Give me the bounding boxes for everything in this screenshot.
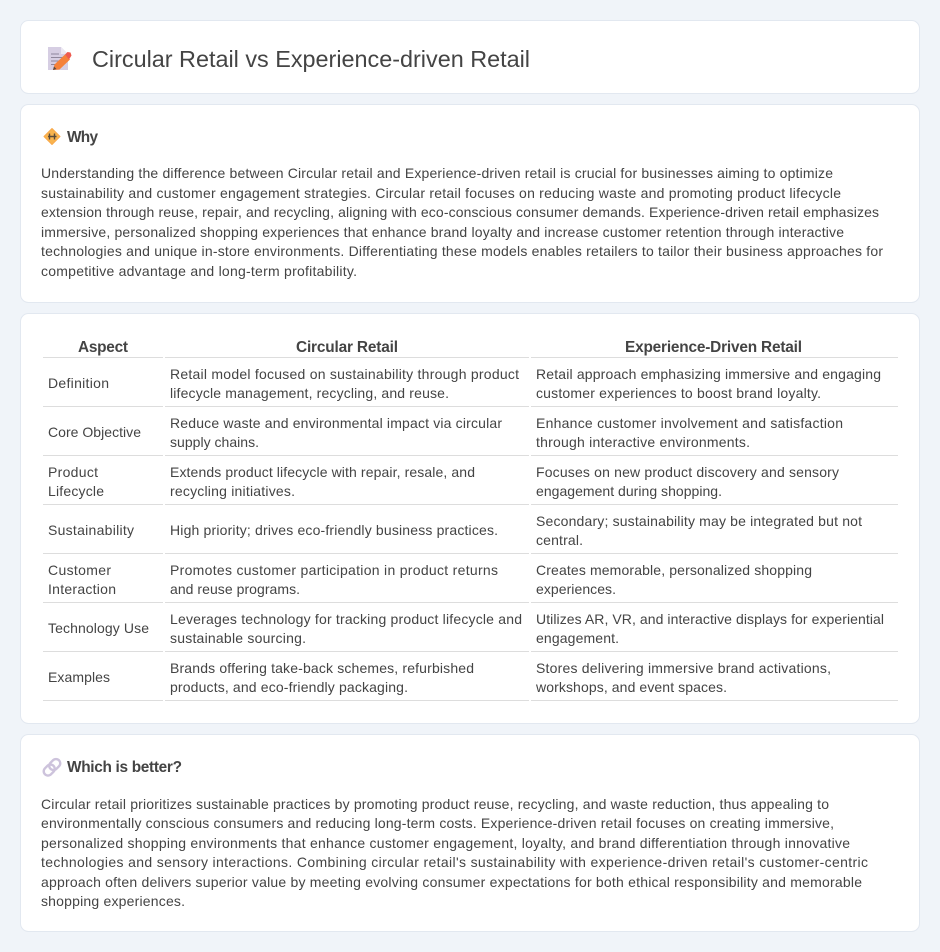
icon: memo with pencil bbox=[48, 47, 72, 70]
row: customer interaction: experiences. bbox=[536, 581, 616, 597]
row: sustainability: central. bbox=[536, 532, 583, 548]
row: product lifecycle: Focuses on new product discovery and sensory bbox=[536, 464, 839, 480]
row: product lifecycle bbox=[48, 464, 839, 499]
row: examples: products, and eco-friendly packaging. bbox=[170, 679, 408, 695]
row: product lifecycle: Product bbox=[48, 464, 98, 480]
row: sustainability: Secondary; sustainability may be integrated but not bbox=[536, 513, 862, 529]
text block: why paragraph: technologies and unique in-store environments. Differentiating these models enables retailers to tailor their business approaches for bbox=[41, 243, 883, 259]
text block: which is better paragraph: personalized shopping environments that enhance customer engagement, loyalty, and brand differentiation through innovative bbox=[41, 835, 850, 851]
row: customer interaction: and reuse programs. bbox=[170, 581, 300, 597]
row: definition: lifecycle management, recycling, and reuse. bbox=[170, 385, 449, 401]
text block: which is better paragraph: Circular retail prioritizes sustainable practices by promoting product reuse, recycling, and waste reduction, thus appealing to bbox=[41, 796, 829, 812]
text block: why paragraph: extension through reuse, repair, and recycling, aligning with eco-conscious consumer demands. Experience-driven retail emphasizes bbox=[41, 204, 879, 220]
row: technology use: sustainable sourcing. bbox=[170, 630, 306, 646]
row: customer interaction: Interaction bbox=[48, 581, 116, 597]
row: customer interaction: Promotes customer participation in product returns bbox=[170, 562, 498, 578]
row: examples: Examples bbox=[48, 669, 110, 685]
row: customer interaction: Customer bbox=[48, 562, 111, 578]
text block: which is better paragraph bbox=[41, 796, 868, 909]
table header row: Circular Retail bbox=[296, 339, 398, 356]
row: customer interaction: Creates memorable, personalized shopping bbox=[536, 562, 812, 578]
row: technology use: engagement. bbox=[536, 630, 619, 646]
panel: which is better bbox=[20, 734, 920, 932]
row: core objective: Core Objective bbox=[48, 424, 141, 440]
row: core objective bbox=[48, 415, 843, 450]
row: product lifecycle: Extends product lifecycle with repair, resale, and bbox=[170, 464, 475, 480]
row: core objective: through interactive environments. bbox=[536, 434, 750, 450]
row: product lifecycle: recycling initiatives. bbox=[170, 483, 295, 499]
table header row bbox=[78, 339, 802, 356]
row: technology use: Technology Use bbox=[48, 620, 149, 636]
row: examples bbox=[48, 660, 831, 695]
row: technology use bbox=[48, 611, 884, 646]
row: technology use: Leverages technology for tracking product lifecycle and bbox=[170, 611, 522, 627]
row: product lifecycle: engagement during shopping. bbox=[536, 483, 722, 499]
row: core objective: Enhance customer involvement and satisfaction bbox=[536, 415, 843, 431]
text block: which is better paragraph: environmentally conscious consumers and reducing long-term costs. Experience-driven retail focuses on creating immersive, bbox=[41, 815, 834, 831]
row: technology use: Utilizes AR, VR, and interactive displays for experiential bbox=[536, 611, 884, 627]
row: sustainability: High priority; drives eco-friendly business practices. bbox=[170, 522, 498, 538]
text block: which is better paragraph: technologies and sensory interactions. Combining circular retail's sustainability with experience-driven retail's customer-centric bbox=[41, 854, 868, 870]
row: definition: customer experiences to boost brand loyalty. bbox=[536, 385, 821, 401]
row: examples: Brands offering take-back schemes, refurbished bbox=[170, 660, 474, 676]
table header row: Experience-Driven Retail bbox=[625, 339, 802, 356]
text block: why paragraph: competitive advantage and long-term profitability. bbox=[41, 263, 357, 279]
text block: which is better paragraph: shopping experiences. bbox=[41, 893, 185, 909]
heading: which is better: Which is better? bbox=[67, 759, 182, 776]
row: core objective: supply chains. bbox=[170, 434, 259, 450]
table header row: Aspect bbox=[78, 339, 128, 356]
row: customer interaction bbox=[48, 562, 812, 597]
row: examples: Stores delivering immersive brand activations, bbox=[536, 660, 831, 676]
row: definition: Definition bbox=[48, 375, 109, 391]
row: sustainability: Sustainability bbox=[48, 522, 134, 538]
row: sustainability bbox=[48, 513, 862, 548]
text block: why paragraph: Understanding the difference between Circular retail and Experience-driven retail is crucial for businesses aiming to optimize bbox=[41, 165, 833, 181]
row: definition bbox=[48, 366, 881, 401]
panel: why bbox=[20, 104, 920, 302]
row: core objective: Reduce waste and environmental impact via circular bbox=[170, 415, 502, 431]
title: Circular Retail vs Experience-driven Retail bbox=[92, 46, 530, 72]
row: examples: workshops, and event spaces. bbox=[535, 679, 727, 695]
text block: which is better paragraph: approach often delivers superior value by meeting evolving consumer expectations for both ethical responsibility and memorable bbox=[41, 874, 862, 890]
text block: why paragraph bbox=[41, 165, 883, 279]
icon: orange diamond bbox=[44, 128, 60, 144]
row: product lifecycle: Lifecycle bbox=[48, 483, 104, 499]
panel: comparison table bbox=[20, 314, 920, 724]
row: definition: Retail approach emphasizing immersive and engaging bbox=[536, 366, 881, 382]
panel: title header bbox=[20, 20, 920, 94]
row: definition: Retail model focused on sustainability through product bbox=[170, 366, 519, 382]
text block: why paragraph: sustainability and customer engagement strategies. Circular retail focuses on reducing waste and promoting product lifecycle bbox=[41, 185, 841, 201]
heading: why: Why bbox=[67, 129, 98, 146]
text block: why paragraph: immersive, personalized shopping experiences that enhance brand loyalty and increase customer retention through interactive bbox=[41, 224, 844, 240]
icon: link bbox=[42, 757, 62, 777]
